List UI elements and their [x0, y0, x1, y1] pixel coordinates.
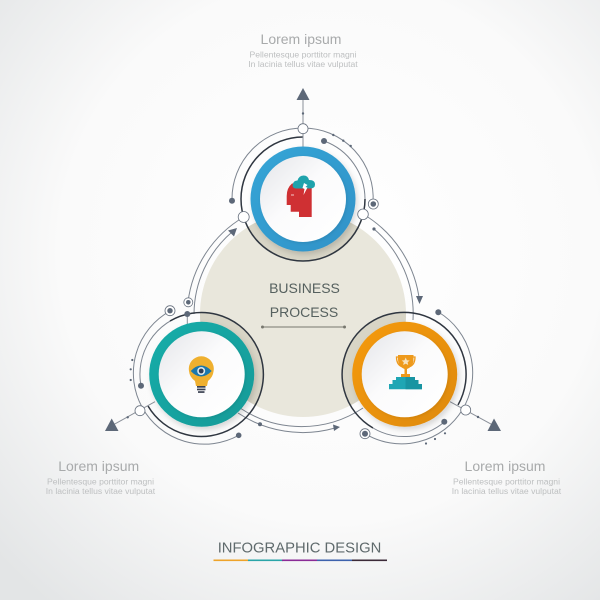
text block: top: Lorem ipsum — [261, 31, 341, 47]
icon: trophy on podium — [389, 355, 422, 389]
arrow: top — [296, 88, 310, 100]
ring: blue — [250, 146, 356, 252]
ring: teal — [149, 322, 254, 427]
arrow: right — [488, 418, 501, 431]
text block: left: Pellentesque porttitor magni — [47, 476, 154, 486]
node: left teal circle — [105, 298, 263, 444]
arrow head: bottom arc — [333, 424, 340, 431]
text block: top: Pellentesque porttitor magni — [249, 50, 357, 60]
text block: top: In lacinia tellus vitae vulputat — [248, 59, 358, 69]
icon: light bulb with eye — [189, 356, 214, 393]
node: right orange circle — [342, 309, 501, 445]
arrow head: right arc — [416, 296, 423, 304]
text block: top — [248, 31, 358, 69]
circuit lines: left — [112, 298, 263, 444]
footer colour rule — [214, 560, 387, 561]
connecting arcs: right side — [363, 214, 423, 320]
arrow: left — [105, 418, 118, 431]
center heading: PROCESS — [270, 304, 338, 320]
text block: right — [452, 458, 562, 496]
text block: left — [46, 458, 156, 496]
connecting arcs: left side — [188, 217, 244, 314]
arrow head: left arc — [228, 228, 237, 236]
circuit lines: right — [342, 309, 494, 445]
text block: left: In lacinia tellus vitae vulputat — [46, 486, 156, 496]
circuit lines: top — [229, 94, 378, 261]
center heading — [269, 280, 340, 320]
white disc: left — [159, 331, 245, 417]
footer title: INFOGRAPHIC DESIGN — [218, 540, 381, 556]
text block: left: Lorem ipsum — [58, 458, 139, 474]
connecting arcs: bottom side — [238, 408, 363, 433]
center heading: BUSINESS — [269, 280, 340, 296]
node: top blue circle — [229, 88, 378, 261]
text block: right: In lacinia tellus vitae vulputat — [452, 486, 562, 496]
text block: right: Lorem ipsum — [465, 458, 545, 474]
junction: white circles — [135, 124, 471, 416]
white disc: top — [260, 156, 346, 242]
center divider — [261, 326, 346, 328]
icon: head with storm cloud — [287, 176, 315, 217]
central beige circle — [200, 222, 406, 417]
ring: orange — [352, 322, 457, 427]
text block: right: Pellentesque porttitor magni — [453, 476, 560, 486]
white disc: right — [362, 331, 448, 417]
